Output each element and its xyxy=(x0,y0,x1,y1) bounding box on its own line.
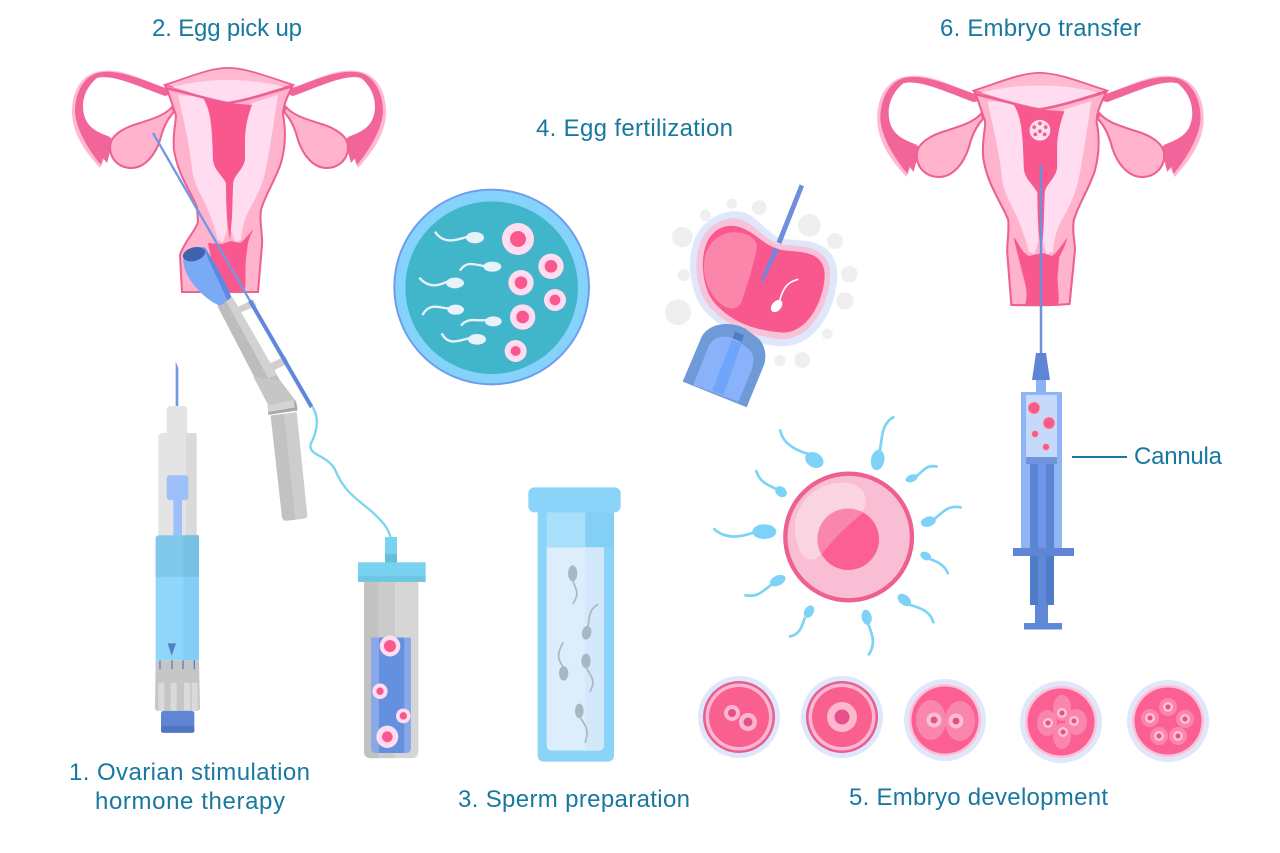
egg cell xyxy=(690,211,837,346)
embryo stage: two cells xyxy=(904,679,986,761)
holding pipette xyxy=(683,324,765,407)
cannula leader line xyxy=(1072,456,1127,458)
surrounding grey droplets xyxy=(665,198,858,368)
heading: step 4: 4. Egg fertilization xyxy=(536,115,733,142)
egg fertilization injection xyxy=(665,184,858,407)
swimming sperm xyxy=(713,417,962,655)
heading: step 6: 6. Embryo transfer xyxy=(940,15,1141,42)
embryo stage: five cells xyxy=(1127,680,1209,762)
heading: step 2: 2. Egg pick up xyxy=(152,15,302,42)
petri dish with eggs and sperm xyxy=(394,190,589,384)
embryo stage: one nucleus xyxy=(801,676,883,758)
embryo development stages xyxy=(698,676,1209,763)
hormone injection pen xyxy=(155,362,200,733)
uterus with embryo transfer xyxy=(877,73,1204,305)
fertilized egg with sperm xyxy=(713,417,962,655)
embryo stage: four cells xyxy=(1020,681,1102,763)
heading: step 5: 5. Embryo development xyxy=(849,784,1108,811)
injection needle xyxy=(761,184,804,284)
diagram: egg pick up xyxy=(72,68,386,521)
uterus with ovaries xyxy=(72,68,386,292)
heading: step 1: 1. Ovarian stimulation xyxy=(69,759,310,786)
embryo stage: two pronuclei xyxy=(698,676,780,758)
heading: step 3: 3. Sperm preparation xyxy=(458,786,690,813)
sperm preparation tube xyxy=(528,487,621,762)
embryo transfer syringe xyxy=(1013,165,1074,630)
speculum with needle xyxy=(153,133,312,521)
heading: step 1 xyxy=(69,759,310,815)
heading: step 1: hormone therapy xyxy=(95,788,285,815)
label: cannula: Cannula xyxy=(1134,443,1223,470)
tube with collected eggs and wire xyxy=(310,407,426,758)
